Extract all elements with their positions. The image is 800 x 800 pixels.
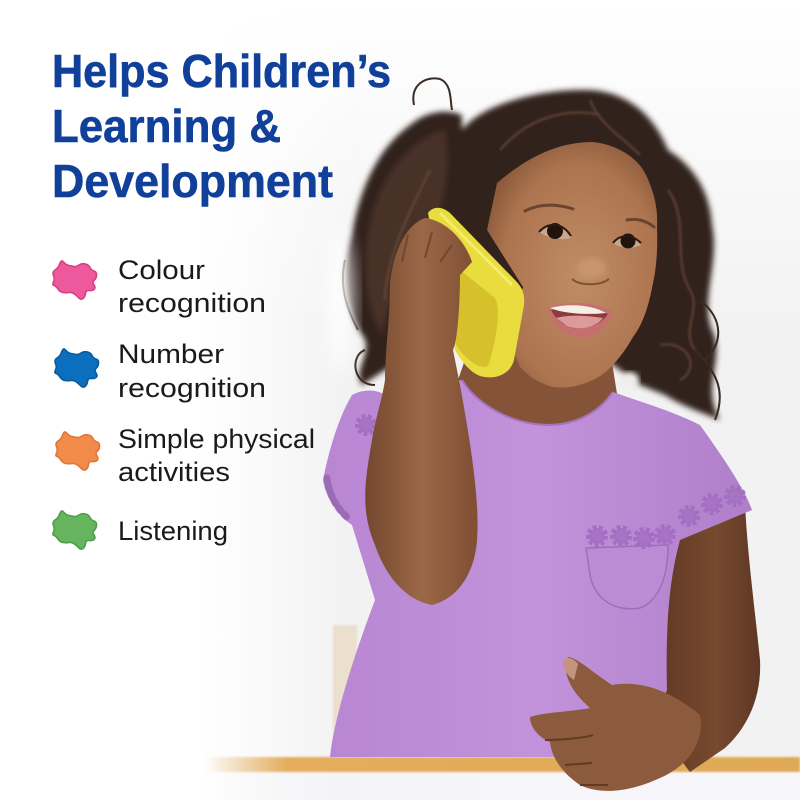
table [205, 757, 800, 800]
left side soft fade over hair [326, 230, 354, 370]
shirt pocket [586, 545, 668, 609]
hair wisps [343, 78, 720, 420]
title: Development [52, 155, 333, 207]
flower trim: left sleeve [327, 417, 374, 517]
item: simple physical activities [56, 424, 315, 487]
icon: blue splat [55, 349, 99, 387]
item: colour recognition [53, 255, 266, 318]
label: number recognition: Number [118, 339, 224, 369]
icon: pink splat [53, 261, 97, 299]
label: number recognition [118, 339, 266, 403]
nose [572, 258, 609, 284]
item: listening [53, 511, 228, 549]
hair: back and ponytail [343, 78, 720, 420]
icon: green splat [53, 511, 97, 549]
label: simple physical activities: activities [118, 457, 230, 487]
item: number recognition [55, 339, 266, 403]
lower hand [530, 657, 701, 791]
flower trim: sleeve [681, 488, 743, 524]
mouth [547, 303, 613, 338]
label: number recognition: recognition [118, 373, 266, 403]
flower trim: pocket [589, 527, 673, 546]
phone [428, 208, 524, 377]
shirt [323, 380, 752, 757]
lower arm [650, 505, 760, 772]
face [487, 142, 657, 387]
title [52, 45, 391, 207]
title: Learning & [52, 100, 281, 152]
label: colour recognition: Colour [118, 255, 205, 285]
neck [458, 345, 618, 450]
hair highlights [385, 100, 695, 380]
icon: orange splat [56, 432, 100, 470]
raised arm and hand [365, 218, 478, 605]
background gaps between curls [621, 372, 639, 388]
shirt collar line [462, 380, 613, 425]
label: colour recognition: recognition [118, 288, 266, 318]
eyes [539, 223, 641, 248]
label: simple physical activities [118, 424, 315, 487]
label: listening: Listening [118, 516, 228, 546]
title: Helps Children’s [52, 45, 391, 97]
eyebrows [525, 205, 654, 227]
label: simple physical activities: Simple physical [118, 424, 315, 454]
child [323, 78, 760, 791]
chair post [333, 625, 357, 750]
label: colour recognition [118, 255, 266, 318]
